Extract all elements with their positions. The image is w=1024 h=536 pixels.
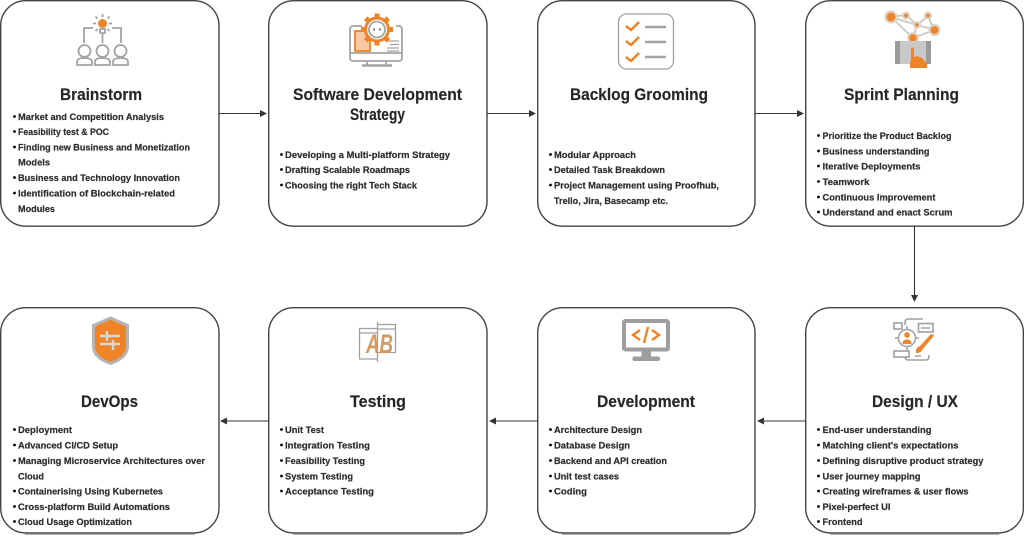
arrow: Testing to DevOps: [220, 418, 268, 424]
text block: Strategy list: Choosing the right Tech Stack: [285, 180, 418, 192]
text block: Testing list: [280, 425, 374, 498]
panel: Brainstorm: [1, 1, 219, 226]
text block: Design list: Creating wireframes & user flows: [822, 486, 968, 498]
text block: DevOps list: Advanced CI/CD Setup: [18, 440, 118, 452]
heading: Design / UX: Design / UX: [872, 393, 958, 411]
text block: Brainstorm list: Identification of Blockchain-related: [18, 188, 175, 200]
text block: DevOps list: Cloud Usage Optimization: [18, 517, 132, 528]
icon: shield: [94, 318, 128, 364]
text block: Strategy list: [280, 150, 451, 192]
text block: Brainstorm list: Business and Technology Innovation: [18, 173, 180, 184]
text block: Development list: Architecture Design: [554, 425, 642, 436]
text block: Testing list: Unit Test: [285, 425, 325, 436]
panel: Development: [538, 308, 755, 534]
heading: Software Development Strategy: Software Development: [293, 86, 462, 104]
panel: Software Development Strategy: [269, 1, 487, 226]
panel: Design / UX: [806, 308, 1023, 534]
heading: Development: Development: [597, 393, 695, 411]
panel: Sprint Planning: [806, 1, 1023, 226]
text block: Sprint list: Iterative Deployments: [822, 162, 920, 172]
arrow: Development to Testing: [489, 418, 537, 424]
text block: Strategy list: Developing a Multi-platform Strategy: [285, 150, 451, 161]
text block: DevOps list: Deployment: [18, 425, 73, 436]
text block: Design list: Matching client's expectations: [822, 440, 958, 452]
text block: Brainstorm list: Market and Competition Analysis: [18, 112, 164, 123]
text block: Development list: [549, 425, 667, 498]
text block: Sprint list: Prioritize the Product Backlog: [822, 131, 952, 142]
heading: Backlog Grooming: Backlog Grooming: [570, 86, 708, 104]
text block: Brainstorm list: Finding new Business and Monetization: [18, 142, 190, 154]
heading: Brainstorm: Brainstorm: [60, 86, 142, 104]
text block: DevOps list: Containerising Using Kubernetes: [18, 486, 163, 498]
icon: user experience design: [894, 319, 934, 360]
heading: DevOps: DevOps: [81, 393, 138, 411]
text block: Testing list: Integration Testing: [285, 440, 370, 452]
text block: Design list: [817, 425, 984, 528]
heading: Software Development Strategy: [293, 86, 462, 124]
text block: Sprint list: Business understanding: [822, 146, 930, 158]
text block: Brainstorm list: Feasibility test & POC: [18, 127, 109, 138]
text block: Brainstorm list: Models: [18, 158, 50, 168]
text block: Backlog list: Detailed Task Breakdown: [554, 165, 665, 176]
icon: tablet with connected network: [886, 12, 940, 68]
panel: Backlog Grooming: [538, 1, 755, 226]
text block: Backlog list: Modular Approach: [554, 150, 636, 161]
text block: Strategy list: Drafting Scalable Roadmaps: [285, 165, 410, 176]
text block: Design list: Pixel-perfect UI: [822, 502, 891, 513]
text block: Design list: User journey mapping: [822, 472, 921, 482]
text block: Design list: End-user understanding: [822, 425, 932, 436]
arrow: Design to Development: [757, 418, 805, 424]
arrow: Backlog to Sprint: [755, 110, 804, 117]
text block: DevOps list: Managing Microservice Architectures over: [18, 456, 205, 467]
text block: Development list: Database Design: [554, 440, 630, 452]
heading: Software Development Strategy: Strategy: [350, 106, 406, 124]
heading: Sprint Planning: Sprint Planning: [844, 86, 959, 104]
text block: Development list: Unit test cases: [554, 472, 619, 482]
icon: A/B test: AB: [365, 329, 393, 359]
icon: A/B test: [360, 322, 396, 362]
icon: code monitor: [624, 321, 668, 361]
text block: Backlog list: Trello, Jira, Basecamp etc.: [554, 196, 668, 207]
heading: Testing: Testing: [350, 393, 406, 411]
text block: DevOps list: [13, 425, 205, 528]
icon: monitor with gear: [350, 14, 402, 66]
text block: Development list: Coding: [554, 486, 587, 498]
text block: Brainstorm list: [13, 112, 190, 215]
text block: DevOps list: Cloud: [18, 472, 44, 482]
text block: DevOps list: Cross-platform Build Automations: [18, 502, 170, 513]
icon: team with light bulb: [77, 14, 128, 65]
arrow: Sprint to Design: [911, 226, 918, 302]
icon: checklist: [618, 14, 674, 69]
text block: Brainstorm list: Modules: [18, 204, 55, 215]
arrow: Strategy to Backlog: [487, 110, 536, 117]
text block: Testing list: Acceptance Testing: [285, 486, 374, 498]
panel: DevOps: [1, 308, 219, 534]
panel: Testing: [269, 308, 487, 534]
text block: Development list: Backend and API creation: [554, 456, 667, 467]
arrow: Brainstorm to Strategy: [219, 110, 267, 117]
text block: Testing list: Feasibility Testing: [285, 456, 365, 467]
text block: Backlog list: [549, 150, 719, 207]
text block: Design list: Frontend: [822, 517, 863, 528]
text block: Design list: Defining disruptive product strategy: [822, 456, 984, 467]
text block: Sprint list: Teamwork: [822, 177, 870, 188]
text block: Sprint list: Understand and enact Scrum: [822, 208, 952, 218]
text block: Testing list: System Testing: [285, 472, 353, 482]
text block: Sprint list: Continuous Improvement: [822, 192, 936, 204]
text block: Backlog list: Project Management using Proofhub,: [554, 180, 719, 192]
text block: Sprint list: [817, 131, 952, 218]
